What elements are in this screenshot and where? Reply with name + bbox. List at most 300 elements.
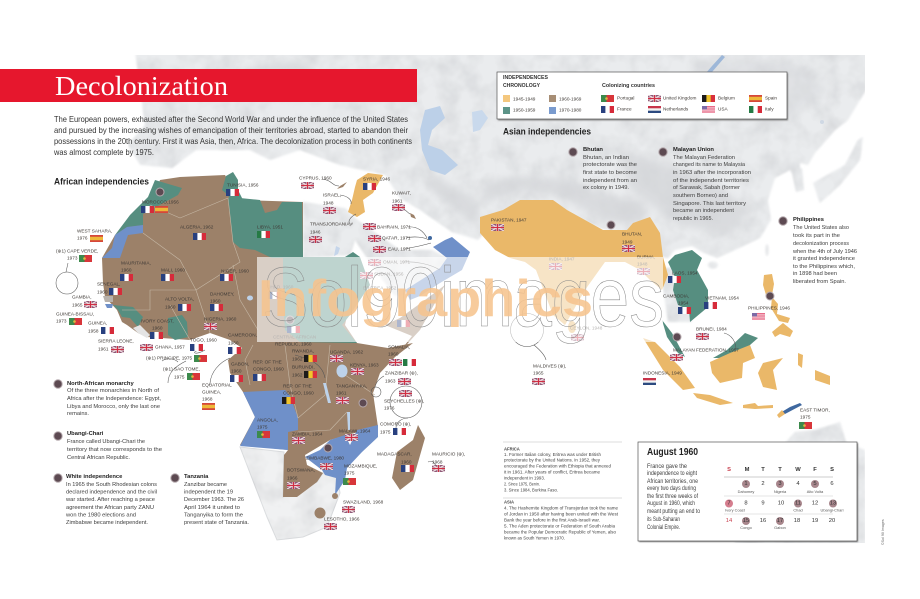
legend swatches: 1970-1980 [559, 108, 582, 112]
label: Lesotho [324, 516, 360, 530]
label: Bahrain: BAHRAIN, 1971 [377, 224, 411, 230]
label: Israel: ISRAEL, [323, 192, 341, 198]
label: Sao Tome: (⊕1) SAO TOME, [163, 366, 200, 372]
label: Ivory Coast: IVORY COAST, [141, 318, 174, 324]
callout 2: Ubangi-Chari: Central African Republic. [67, 455, 130, 461]
callout 1: North-African monarchy: Libya and Morocco, only the last one [67, 404, 160, 410]
label: Laos: LAOS, 1954 [672, 270, 698, 276]
image credit: ©Sol 90 Images [881, 519, 885, 545]
calendar grid: 12 [812, 500, 818, 506]
label: Seychelles: 1976 [384, 406, 395, 410]
calendar grid: S [727, 467, 731, 473]
label: Gabon: 1960 [231, 368, 242, 374]
legend swatches: 1950-1959 [513, 108, 536, 112]
label: Tunisia [226, 182, 259, 196]
legend flags: Italy [765, 106, 774, 112]
calendar grid: Ivory Coast [725, 508, 746, 512]
callout 3: White independence: declared independence and the civil [66, 490, 157, 496]
callout 7: Philippines: decolonization process [793, 241, 849, 247]
label: Brunei: BRUNEI, 1984 [696, 326, 727, 332]
label: Nigeria [204, 316, 237, 330]
callout 7: Philippines: Philippines [793, 217, 824, 223]
label: Mali: MALI, 1960 [161, 268, 185, 272]
label: Transjordania: TRANSJORDANIA,⁴ [310, 222, 353, 226]
label: Djibouti [397, 320, 410, 327]
label: Madagascar: 1960 [401, 460, 412, 464]
country labels: Middle East [299, 176, 411, 266]
footnotes: independent in 1993. [504, 476, 545, 480]
footnotes: 5. The Aden protectorate or Federation of South Arabia [504, 524, 616, 528]
label: Lesotho: LESOTHO, 1966 [324, 516, 360, 522]
footnotes: became the Popular Democratic Republic of Yemen, also [504, 530, 617, 534]
callout 2: Ubangi-Chari: Ubangi-Chari [67, 431, 104, 437]
label: Equatorial Guinea [202, 382, 232, 410]
Malaya [662, 320, 685, 357]
label: Laos [668, 270, 698, 283]
footnotes: encouraged the Federation with Ethiopia that annexed [504, 464, 612, 468]
label: Cape Verde [56, 248, 98, 262]
footnotes: protectorate by the United Nations. In 1952, they [504, 458, 601, 462]
label: Israel: 1948 [323, 200, 334, 206]
legend flags: Portugal [617, 96, 634, 100]
callout 5: Bhutan: ex colony in 1949. [583, 185, 629, 191]
label: Qatar: QATAR, 1971 [382, 236, 411, 240]
legend flags: France [617, 106, 632, 112]
label: Angola: ANGOLA, [257, 418, 278, 422]
Brown: independence 1960-1969 [102, 175, 413, 455]
intro text [53, 114, 412, 157]
label: Comoro [380, 422, 411, 435]
label: Kenya [350, 362, 379, 375]
label: Cameroon: 1960 [228, 340, 239, 346]
Liberia and Gambia [133, 325, 150, 338]
callout 4: Tanzania: Zanzibar became [184, 482, 227, 488]
label: Sao Tome [163, 366, 200, 380]
label: Tanganyika: 1961 [336, 390, 347, 396]
Blue: independence 1970-1980 [102, 225, 378, 495]
label: Cameroon [228, 332, 257, 354]
calendar grid: 19 [812, 518, 818, 524]
country labels: Asia [491, 218, 830, 429]
title [0, 69, 417, 102]
label: Kuwait [392, 190, 411, 211]
legend flags: Netherlands [663, 106, 689, 112]
callout 5: Bhutan: Bhutan, an Indian [583, 155, 629, 161]
calendar grid: 17 [777, 518, 783, 524]
label: Guinea-Bissau: 1973 [56, 318, 67, 324]
legend flags: USA [718, 106, 729, 112]
label: Cyprus: CYPRUS, 1960 [299, 176, 332, 180]
callout 1: North-African monarchy: Africa after the Independence: Egypt, [67, 396, 161, 402]
footnotes: 4. The Hashemite Kingdom of Transjordan took the name [504, 506, 619, 510]
label: West Sahara: WEST SAHARA, [77, 228, 112, 234]
label: Cambodia: 1954 [678, 300, 689, 306]
legend swatches: 1960-1969 [559, 96, 582, 102]
label: Bhutan [622, 232, 642, 252]
callout 4: Tanzania: April 1964 it united to [184, 505, 240, 511]
footnotes: AFRICA [504, 446, 520, 452]
callout 6: Malayan Union: Singapore. This last territory [673, 201, 746, 207]
label: Tanganyika: TANGANYIKA, [336, 384, 367, 388]
intro text: and pursued by the increasing wishes of emancipation of their territories abroad, started to abandon their [54, 125, 408, 135]
callout 6: Malayan Union: The Malayan Federation [673, 155, 735, 161]
label: Mauricio: MAURICIO (⊕), [432, 452, 465, 456]
callout 3: White independence: White independence [66, 474, 123, 480]
label: Transjordania [309, 222, 353, 243]
callout 6: Malayan Union: in 1963 after the incorporation [673, 170, 751, 176]
panel: August 1960 calendar [638, 442, 858, 542]
label: Seychelles: SEYCHELLES (⊕), [384, 398, 424, 404]
label: Swaziland: SWAZILAND, 1968 [343, 500, 384, 504]
Somalia, Madagascar and small states [314, 182, 445, 518]
label: Zanzibar: ZANZIBAR (⊕), [385, 370, 418, 376]
label: Ceylon [570, 326, 603, 341]
label: Kenya: KENYA, 1963 [350, 362, 379, 368]
callout 6: Malayan Union [659, 147, 751, 222]
label: Equatorial Guinea: 1968 [202, 396, 213, 402]
label: Guinea: 1958 [88, 328, 99, 334]
legend flags: Spain [765, 96, 777, 100]
intro text: was almost complete by 1975. [53, 147, 154, 157]
label: Vietnam: VIETNAM, 1954 [705, 296, 739, 300]
label: West Sahara [77, 228, 112, 242]
label: Botswana: 1966 [287, 476, 298, 480]
callout 5: Bhutan: independent from an [583, 178, 637, 184]
label: Zimbabwe: ZIMBABWE, 1980 [306, 456, 344, 460]
callout 6: Malayan Union: southern Borneo) and [673, 193, 728, 199]
Syria, Israel, Transjordan [348, 173, 383, 217]
label: India: INDIA, 1947 [549, 256, 575, 262]
label: Rwanda: RWANDA, [292, 348, 314, 354]
label: Malayan Federation [670, 348, 739, 361]
title: Decolonization [55, 71, 229, 101]
label: Burma [637, 254, 655, 275]
callout 7: Philippines: in 1898 had been [793, 271, 837, 277]
label: Senegal: 1960 [97, 290, 108, 294]
callout 3: White independence: agreement the African party ZANU [66, 505, 154, 511]
label: India [549, 256, 575, 270]
calendar grid: Ubangi-Chari [821, 508, 844, 512]
callout 7: Philippines [779, 217, 857, 285]
label: Mauricio: 1968 [432, 460, 443, 464]
footnotes: 1. Former Italian colony, Eritrea was under British [504, 452, 602, 457]
label: Uganda [330, 350, 363, 362]
label: Central African Republic [273, 326, 316, 346]
calendar grid: 15 [743, 518, 749, 524]
label: Central African Republic: CENTRAL AFRICAN [273, 334, 316, 340]
callout 1: North-African monarchy: North-African monarchy [67, 381, 134, 387]
southern Africa base [240, 447, 340, 540]
label: Mali [161, 268, 185, 281]
label: Zambia: ZAMBIA, 1964 [292, 432, 323, 436]
calendar text: Colonial Empire. [647, 525, 680, 531]
label: Indonesia: INDONESIA, 1949 [643, 370, 682, 376]
callout 3: White independence [54, 474, 157, 526]
calendar grid: 18 [794, 518, 800, 524]
label: Burma: BURMA, [637, 254, 655, 260]
label: Rwanda [292, 348, 317, 362]
label: Vietnam [704, 296, 739, 309]
legend heading: chronology [503, 75, 549, 89]
calendar text: every two days during [647, 486, 696, 492]
label: Ghana [140, 344, 185, 351]
callout 3: White independence: won the 1980 elections and [65, 512, 136, 518]
calendar heading: August 1960 [647, 446, 698, 458]
callout 3: White independence: Zimbabwe became independent. [66, 520, 148, 526]
label: Chad: CHAD, 1960 [267, 284, 294, 290]
label: Cambodia [663, 294, 691, 314]
calendar grid: F [813, 467, 817, 473]
callout 4: Tanzania: December 1963. The 26 [184, 497, 244, 503]
label: Seychelles [384, 390, 424, 410]
Green: independence 1950-1959 [113, 172, 370, 343]
label: Israel [323, 192, 341, 214]
label: Equatorial Guinea: EQUATORIAL [202, 382, 232, 388]
callout 1: North-African monarchy: remains. [67, 411, 89, 417]
calendar grid [724, 467, 844, 530]
label: Tunisia: TUNISIA, 1956 [227, 182, 259, 188]
label: Gambia: GAMBIA, [72, 294, 92, 300]
legend flags [601, 95, 777, 113]
label: Niger [220, 268, 249, 281]
label: Zimbabwe [306, 456, 344, 470]
Botswana [283, 455, 323, 497]
label: Togo [190, 338, 217, 351]
calendar text: meant putting an end to [647, 509, 701, 515]
background map: grey land masses [128, 50, 870, 545]
callout 7: Philippines: to the Philippines which, [793, 264, 855, 270]
label: East Timor [799, 408, 830, 429]
label: Rep. of the Congo (Belgium): CONGO, 1960 [283, 390, 314, 396]
label: Indonesia [643, 370, 682, 385]
footnotes: it in 1961. After years of conflict, Eritrea became [504, 470, 601, 474]
label: Guinea [88, 320, 114, 334]
callout 1: North-African monarchy: Of the three monarchies in North of [67, 388, 159, 394]
label: Madagascar: MADAGASCAR, [377, 452, 412, 456]
footnotes: of Jordan in 1950 after having been united with the West [504, 512, 619, 516]
label: East Timor: 1975 [800, 414, 811, 420]
calendar grid: W [795, 467, 801, 473]
label: Zanzibar: 1963 [385, 378, 396, 384]
label: Burundi: 1962 [292, 372, 303, 378]
calendar grid: 3 [778, 481, 782, 487]
map of Asia [480, 200, 830, 418]
label: Uganda: UGANDA, 1962 [330, 350, 363, 354]
calendar text: its Sub-Saharan [647, 517, 680, 523]
label: Libya [257, 224, 283, 238]
calendar grid: 1 [744, 481, 748, 487]
callout 2: Ubangi-Chari: France called Ubangi-Chari the [67, 439, 145, 445]
map of the Middle East [348, 173, 470, 300]
calendar grid: M [745, 467, 750, 473]
label: Central African Republic: REPUBLIC, 1960 [275, 342, 312, 346]
numbered map markers [156, 188, 774, 452]
callout 7: Philippines: it granted independence [793, 256, 855, 262]
calendar grid: 16 [760, 518, 766, 524]
callout 6: Malayan Union: changed its name to Malaysia [673, 162, 746, 168]
label: Equatorial Guinea: GUINEA, [202, 390, 221, 394]
calendar grid: Dahomey [738, 489, 754, 494]
footnotes [503, 442, 622, 540]
label: Guinea-Bissau: GUINEA-BISSAU, [56, 312, 94, 316]
label: Brunei [696, 326, 727, 340]
label: Sierra Leone: 1961 [98, 346, 109, 352]
label: Ghana: GHANA, 1957 [155, 344, 185, 350]
East Timor [780, 403, 802, 414]
label: Chad [267, 284, 294, 299]
calendar text: independence to eight [647, 471, 697, 477]
South Asia [480, 200, 668, 325]
callout 7: Philippines: The United States also [793, 225, 849, 231]
Indochina [668, 250, 708, 322]
label: Malawi [339, 428, 371, 441]
legend heading: chronology: CHRONOLOGY [503, 83, 541, 89]
label: Mauricio [432, 452, 465, 472]
calendar grid: 11 [795, 500, 801, 506]
calendar grid: 7 [727, 500, 731, 506]
label: Dahomey: DAHOMEY, [210, 292, 235, 296]
calendar text: August in 1960, which [647, 501, 695, 507]
country labels: Africa [56, 182, 465, 530]
label: Sudan [360, 272, 404, 279]
label: Kuwait: KUWAIT, [392, 190, 411, 196]
label: Ivory Coast [141, 318, 174, 339]
label: Burundi [292, 364, 317, 378]
label: Alto Volta: ALTO VOLTA, [165, 296, 194, 302]
label: Ivory Coast: 1960 [152, 326, 163, 330]
label: Algeria: ALGERIA, 1962 [180, 224, 214, 230]
label: Senegal: SENEGAL, [97, 282, 120, 286]
intro text: The European powers, exhausted after the Second World War and under the influence of the United States [54, 114, 408, 124]
label: Cambodia: CAMBODIA, [663, 294, 689, 298]
calendar grid: 20 [829, 518, 835, 524]
label: Comoro: 1975 [380, 430, 391, 434]
label: Mozambique: MOZAMBIQUE, [344, 464, 377, 468]
label: Comoro: COMORO (⊕), [380, 422, 411, 426]
label: Rep. of the Congo (Belgium) [282, 384, 314, 404]
legend swatches: 1945-1949 [513, 96, 536, 102]
callout 3: White independence: war started. After reaching a peace [65, 497, 155, 503]
callout 4: Tanzania [171, 474, 249, 526]
callout 7: Philippines: liberated from Spain. [793, 279, 846, 285]
label: Guinea: GUINEA, [88, 320, 107, 326]
label: Pakistan: PAKISTAN, 1947 [491, 218, 527, 222]
callout 5: Bhutan [569, 147, 637, 191]
label: Morocco: MOROCCO,1956 [142, 200, 179, 204]
label: EAU: EAU, 1971 [388, 246, 411, 252]
calendar text: the first three weeks of [647, 494, 698, 500]
label: Madagascar [377, 452, 414, 472]
label: Cape Verde: 1973 [67, 256, 78, 260]
legend flags: Belgium [718, 96, 735, 100]
label: Togo: TOGO, 1960 [190, 338, 217, 342]
callout 7: Philippines: took its part in the [793, 233, 840, 239]
calendar text: African territories, one [647, 479, 699, 485]
calendar grid: Congo [740, 525, 752, 530]
label: Botswana [287, 468, 315, 489]
calendar grid: 10 [778, 500, 784, 506]
label: Swaziland [342, 500, 384, 513]
callout 5: Bhutan: first state to become [583, 170, 637, 176]
label: Sierra Leone [98, 338, 134, 353]
label: Mauritania [120, 260, 151, 281]
label: Alto Volta: 1960 [165, 304, 176, 310]
label: Gabon [230, 362, 249, 382]
label: Gabon: GABON, [231, 362, 249, 366]
label: Senegal [97, 282, 122, 295]
callout 6: Malayan Union: of Sarawak, Sabah (former [673, 185, 740, 191]
label: Principe [146, 355, 207, 362]
calendar text: France gave the [647, 464, 688, 470]
label: Kuwait: 1961 [392, 198, 403, 204]
heading: African independencies: African independencies [54, 176, 149, 188]
label: Rep. of the Congo (Belgium): REP. OF THE [283, 384, 312, 388]
calendar text [647, 464, 701, 531]
callout 5: Bhutan: protectorate was the [583, 162, 637, 168]
label: Zanzibar [385, 370, 418, 385]
label: Syria: SYRIA, 1946 [363, 176, 390, 182]
legend heading: colonizing countries: Colonizing countries [602, 83, 655, 89]
watermark: orange wordmark: Infographics [258, 270, 593, 328]
Gulf states and Oman [405, 237, 470, 300]
label: Sao Tome: 1975 [174, 374, 185, 380]
label: Libya: LIBYA, 1951 [257, 224, 283, 230]
label: Guinea-Bissau [56, 312, 94, 325]
label: Cameroon: CAMEROON, [228, 332, 257, 338]
calendar grid: S [830, 467, 834, 473]
footnotes: 3. Since 1984, Burkina Faso. [504, 488, 558, 492]
legend swatches [503, 95, 582, 114]
label: Eritrea: ERITREA, 1952 [363, 286, 397, 290]
calendar grid: 5 [813, 481, 817, 487]
Lakes [247, 296, 350, 430]
calendar grid: 6 [830, 481, 834, 487]
watermark: outlined wordmark: Sol90images [262, 250, 664, 344]
label: Gambia [72, 294, 97, 308]
label: Burma: 1948 [637, 262, 648, 266]
label: Rep. of the Congo (France): REP. OF THE [253, 360, 282, 364]
label: Maldives: 1965 [533, 370, 544, 376]
heading: Asian independencies: Asian independencies [503, 126, 591, 138]
calendar grid: 4 [796, 481, 800, 487]
Caspian Sea and inland water [334, 55, 824, 256]
calendar grid: 9 [761, 500, 765, 506]
label: Nigeria: NIGERIA, 1960 [204, 316, 237, 322]
label: Mauritania: 1960 [121, 268, 132, 272]
legend flags: United Kingdom [663, 96, 696, 100]
label: Ceylon: CEYLON, 1948 [570, 326, 603, 330]
calendar grid: T [778, 467, 782, 473]
intro text: possessions in the 20th century. First it was Asia, then, Africa. The decolonization process in both continents [54, 136, 412, 146]
label: Botswana: BOTSWANA, [287, 468, 315, 472]
label: Maldives [532, 364, 566, 385]
label: Sierra Leone: SIERRA LEONE, [98, 338, 134, 344]
translucent watermark panel [257, 257, 663, 342]
calendar grid: 14 [726, 518, 733, 524]
calendar grid: Alto Volta [807, 489, 824, 494]
callout 3: White independence: In 1965 the South Rhodesian colons [66, 482, 157, 488]
label: Principe: (⊕1) PRINCIPE, 1975 [146, 356, 193, 360]
label: Mauritania: MAURITANIA, [121, 260, 151, 266]
calendar grid: 8 [744, 500, 748, 506]
footnotes: Bank the year before in the first Arab-Israeli war. [504, 518, 600, 522]
panel: legend [497, 72, 788, 120]
label: Bhutan: 1949 [622, 240, 633, 244]
label: Alto Volta [165, 296, 194, 311]
label: Angola [257, 418, 278, 438]
label: Morocco [141, 200, 179, 213]
label: Philippines: PHILIPPINES, 1946 [748, 306, 790, 310]
